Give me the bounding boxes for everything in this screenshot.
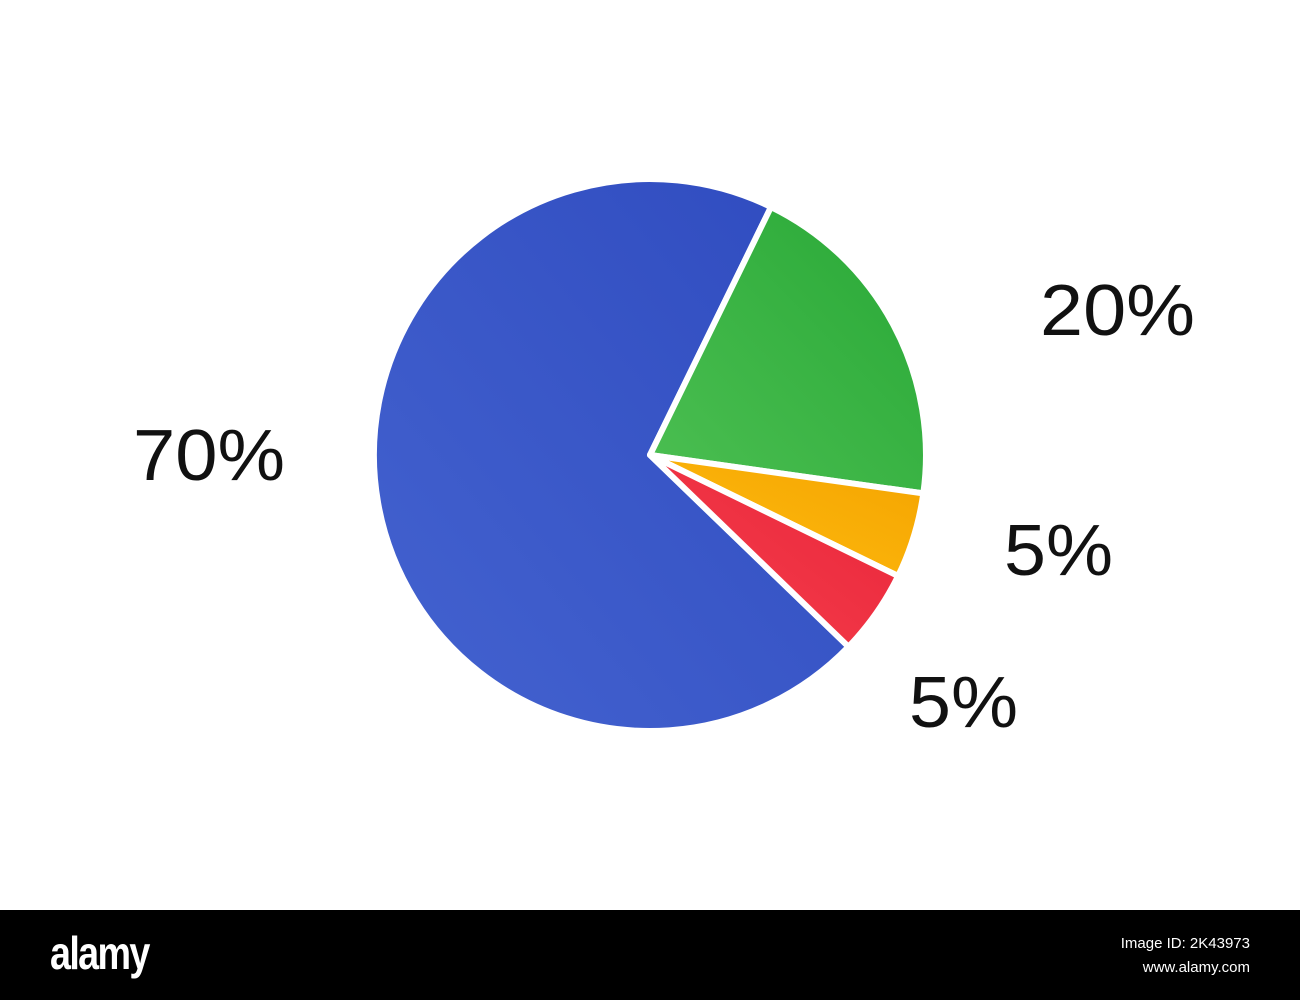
footer bar: [0, 910, 1300, 1000]
footer id text: [1121, 935, 1250, 976]
slice: yellow 5%: [650, 455, 923, 576]
label: 20%: 20%: [1040, 271, 1195, 351]
footer logo: alamy: [50, 927, 149, 979]
footer id text: www.alamy.com: [1143, 959, 1250, 976]
label: 5% red: 5%: [909, 663, 1018, 743]
label: 70%: 70%: [133, 416, 285, 496]
slice: green 20%: [650, 207, 926, 493]
slice: red 5%: [650, 455, 898, 647]
slice: blue 70%: [374, 179, 848, 731]
footer id text: Image ID: 2K43973: [1121, 935, 1250, 952]
label: 5% yellow: 5%: [1004, 511, 1113, 591]
